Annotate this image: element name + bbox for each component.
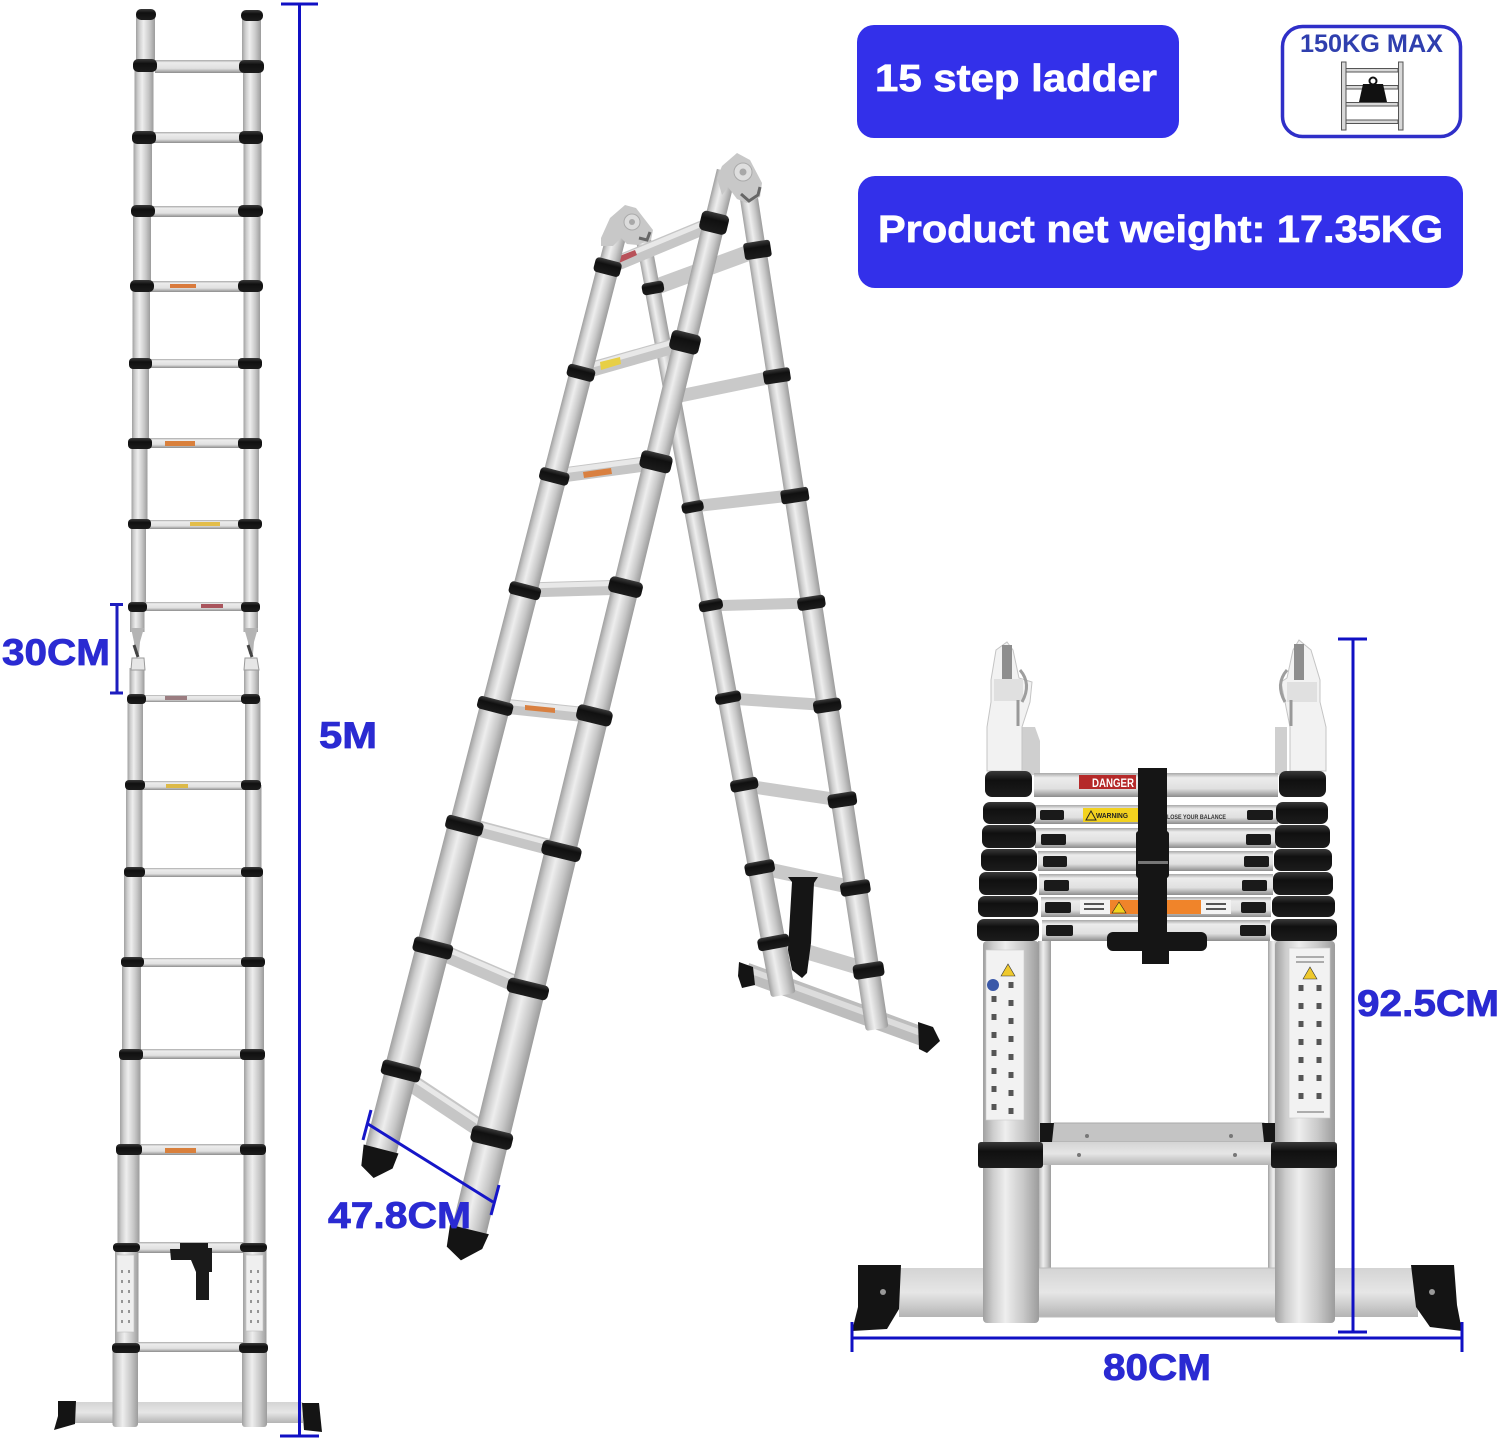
danger sticker: DANGER (1092, 776, 1134, 790)
rear rungs (653, 249, 868, 970)
lower collars (978, 1142, 1337, 1168)
left hinge (987, 642, 1040, 775)
right outer tube (1275, 941, 1335, 1323)
lower rung (1040, 1123, 1275, 1165)
rung highlights (394, 219, 714, 1133)
left foot (852, 1265, 901, 1331)
rear base bar (746, 969, 932, 1040)
dimension: 47.8CM width (328, 1110, 499, 1236)
rung stickers (525, 250, 637, 713)
stacked rungs (1034, 773, 1278, 941)
folded ladder (852, 640, 1462, 1331)
rear feet (738, 962, 940, 1053)
front right rail (441, 166, 747, 1266)
a-frame ladder (354, 153, 940, 1266)
balance warning text: LOSE YOUR BALANCE (1167, 814, 1227, 821)
strap handle (170, 1243, 212, 1300)
right foot (302, 1403, 322, 1432)
dimension: 92.5CM folded height (1338, 639, 1499, 1332)
front right hinge (717, 153, 762, 203)
left rail (112, 14, 155, 1427)
badge: 15 step ladder (857, 25, 1179, 138)
centre hinge (131, 628, 259, 670)
badge: 150KG max load (1282, 26, 1460, 136)
right hinge (1275, 640, 1326, 775)
dimension: 5M height: 5M (319, 715, 377, 756)
warning sticker (1083, 808, 1138, 822)
strap and buckle (1107, 768, 1207, 964)
dimension: 92.5CM folded height: 92.5CM (1357, 983, 1499, 1024)
badge: product net weight: Product net weight: 17.35KG (878, 209, 1443, 251)
left foot (54, 1401, 76, 1430)
right rail (242, 14, 267, 1427)
black side collars (977, 771, 1337, 941)
rear left rail (627, 237, 799, 998)
front left hinge (601, 205, 653, 246)
badge: 150KG max load: 150KG MAX (1300, 30, 1443, 58)
rear section (627, 193, 940, 1053)
badge: product net weight (858, 176, 1463, 288)
extended straight ladder (54, 9, 322, 1432)
rung stickers (165, 284, 223, 1153)
left outer tube (983, 941, 1039, 1323)
base bar (75, 1402, 303, 1423)
dimension: 80CM base width: 80CM (1103, 1347, 1211, 1388)
inner tubes (1038, 941, 1281, 1316)
strap (788, 877, 818, 978)
front rungs (392, 223, 714, 1137)
dimension: 30CM rung spacing (2, 604, 123, 693)
instruction stickers (117, 1255, 263, 1332)
rung grips (1040, 810, 1273, 936)
right foot (1411, 1265, 1462, 1331)
dimension: 47.8CM width: 47.8CM (328, 1195, 471, 1236)
front left rail (354, 222, 638, 1183)
left instruction sticker (986, 950, 1024, 1120)
front section (354, 153, 762, 1266)
danger sticker (1079, 775, 1136, 790)
right instruction sticker (1289, 948, 1330, 1118)
badge: 15 step ladder: 15 step ladder (875, 58, 1157, 100)
rungs (136, 60, 246, 1352)
orange sticker (1080, 900, 1231, 914)
dimension: 30CM rung spacing: 30CM (2, 632, 110, 673)
dimension: 5M height (280, 4, 377, 1436)
collars (112, 9, 268, 1353)
rear right rail (734, 193, 893, 1032)
base bar (899, 1268, 1418, 1317)
warning sticker: WARNING (1096, 813, 1129, 820)
dimension: 80CM base width (852, 1322, 1462, 1388)
icon: ladder with weight (1342, 62, 1403, 130)
